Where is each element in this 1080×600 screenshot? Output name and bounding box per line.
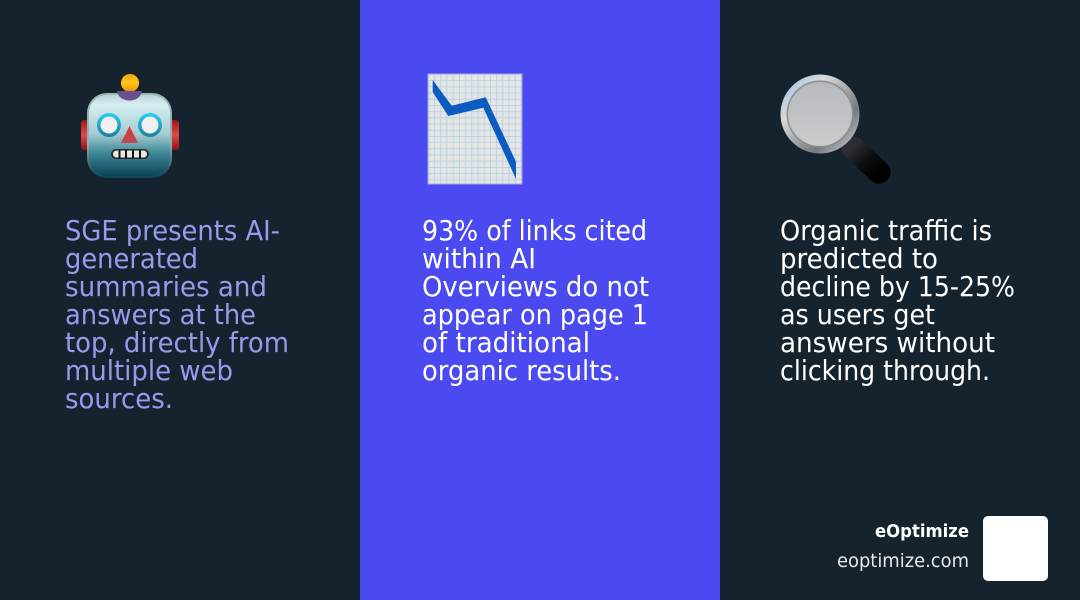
text: SGE description: summaries and: [65, 271, 267, 303]
text: AI Overviews description: organic results.: [422, 355, 621, 387]
text: traffic description: answers without: [780, 327, 995, 359]
panel: organic traffic: [720, 0, 1080, 440]
logo placeholder: [983, 516, 1048, 581]
text: traffic description: [780, 215, 1015, 387]
text: traffic description: predicted to: [780, 243, 938, 275]
text: traffic description: decline by 15-25%: [780, 271, 1015, 303]
text: SGE description: sources.: [65, 383, 173, 415]
text: AI Overviews description: within AI: [422, 243, 536, 275]
text: traffic description: clicking through.: [780, 355, 990, 387]
panel: SGE summaries: [0, 0, 360, 600]
text: AI Overviews description: [422, 215, 649, 387]
text: SGE description: top, directly from: [65, 327, 289, 359]
icon: magnifying glass: [780, 74, 879, 172]
text: AI Overviews description: of traditional: [422, 327, 590, 359]
icon: robot: [81, 74, 179, 178]
text: traffic description: as users get: [780, 299, 935, 331]
brand name: eOptimize: [875, 521, 969, 542]
text: SGE description: [65, 215, 289, 415]
icon: declining chart: [428, 74, 522, 184]
panel: AI Overviews statistic: [360, 0, 720, 600]
brand url: eoptimize.com: [837, 550, 969, 572]
footer: brand: [837, 516, 1048, 581]
text: SGE description: multiple web: [65, 355, 233, 387]
text: AI Overviews description: appear on page 1: [422, 299, 648, 331]
text: traffic description: Organic traffic is: [780, 215, 992, 247]
text: SGE description: SGE presents AI-: [65, 215, 280, 247]
text: AI Overviews description: Overviews do not: [422, 271, 649, 303]
text: SGE description: answers at the: [65, 299, 256, 331]
text: SGE description: generated: [65, 243, 198, 275]
text: AI Overviews description: 93% of links cited: [422, 215, 647, 247]
